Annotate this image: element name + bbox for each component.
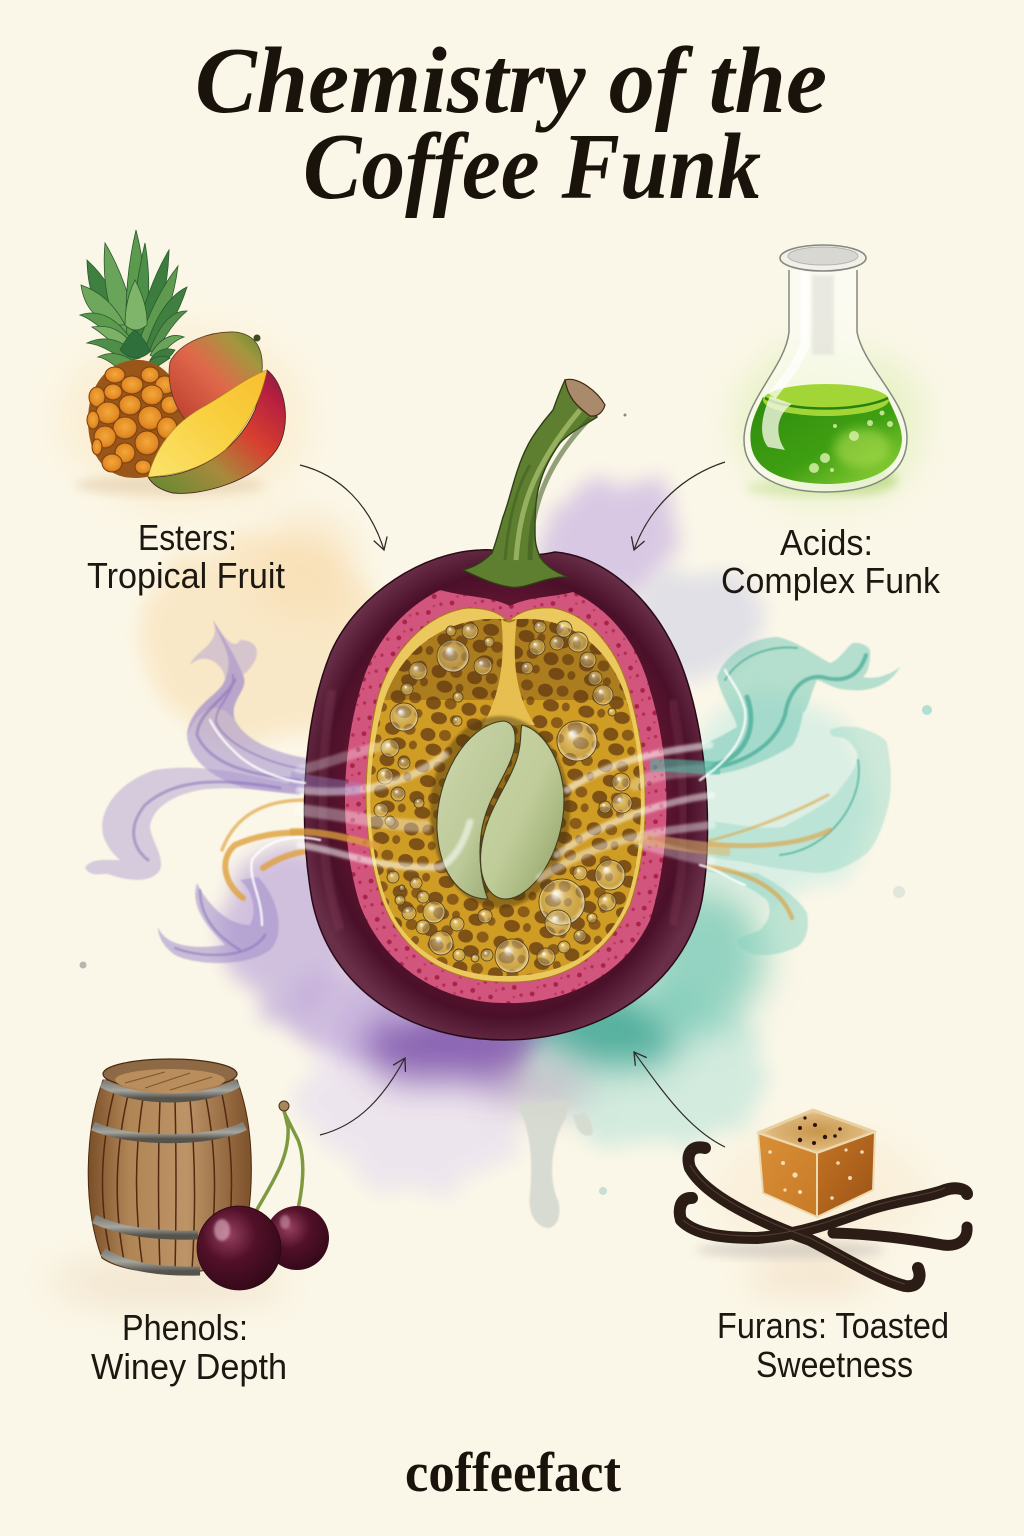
arrow: furans to fruit — [634, 1052, 725, 1147]
paint drips — [515, 1100, 570, 1228]
cherry stems — [250, 1110, 303, 1222]
barrel hoops — [93, 1083, 245, 1271]
arrow: acids to fruit — [634, 462, 725, 550]
title: Coffee Funk — [303, 115, 761, 219]
purple ribbons — [85, 620, 320, 963]
brand: coffeefact: coffeefact — [405, 1442, 621, 1504]
icon: sugar cube and vanilla pods — [680, 1110, 967, 1286]
title — [195, 29, 827, 219]
cut mango — [148, 370, 285, 493]
aroma ribbons behind the fruit — [85, 620, 900, 963]
icon: pineapple and mango — [75, 230, 285, 495]
green coffee bean — [430, 716, 570, 908]
golden mucilage rim — [366, 608, 645, 982]
watercolor washes — [50, 325, 932, 1307]
coffee cherry cross-section — [210, 379, 745, 1040]
barrel body — [88, 1080, 251, 1273]
honeycomb cavity — [370, 618, 641, 976]
amber ribbons — [222, 795, 830, 918]
arrow: phenols to fruit — [320, 1058, 405, 1135]
label: phenols: Phenols: — [122, 1307, 248, 1348]
bubbles — [374, 621, 632, 973]
barrel staves — [102, 1092, 232, 1272]
white aroma veils across fruit — [300, 745, 712, 878]
icon: flask with green liquid — [744, 245, 907, 496]
arrow: esters to fruit — [300, 465, 384, 550]
label: acids — [721, 522, 941, 601]
pink flesh — [345, 590, 666, 1003]
central septum — [483, 618, 535, 725]
label: phenols — [91, 1307, 287, 1387]
back mango — [169, 332, 262, 425]
vanilla pods — [680, 1147, 967, 1286]
title: Chemistry of the — [195, 29, 827, 133]
label: acids: Complex Funk — [721, 560, 941, 601]
label: phenols: Winey Depth — [91, 1346, 287, 1387]
flask liquid — [750, 397, 902, 484]
label: esters: Tropical Fruit — [87, 555, 285, 596]
pineapple body — [88, 360, 187, 478]
stem — [463, 380, 597, 587]
cherries — [265, 1206, 329, 1270]
barrel top — [103, 1059, 237, 1089]
label: esters: Esters: — [138, 517, 237, 558]
label: esters — [87, 517, 285, 596]
pineapple crown — [80, 230, 187, 370]
white strands outside the fruit — [210, 670, 745, 925]
ribbons crossing the skin edge — [290, 765, 730, 850]
sugar cube — [758, 1110, 875, 1153]
vanilla shadows — [695, 1242, 885, 1258]
label: furans: Furans: Toasted — [717, 1305, 949, 1346]
icon: barrel and cherries — [88, 1059, 329, 1290]
teal strands — [700, 647, 866, 855]
label: furans — [717, 1305, 949, 1385]
label: furans: Sweetness — [756, 1344, 913, 1385]
skin highlight — [322, 690, 340, 930]
purple strands — [134, 675, 310, 955]
outer skin — [304, 550, 708, 1040]
label: acids: Acids: — [780, 522, 873, 563]
flask glass — [744, 270, 907, 492]
teal ribbons — [650, 637, 900, 955]
